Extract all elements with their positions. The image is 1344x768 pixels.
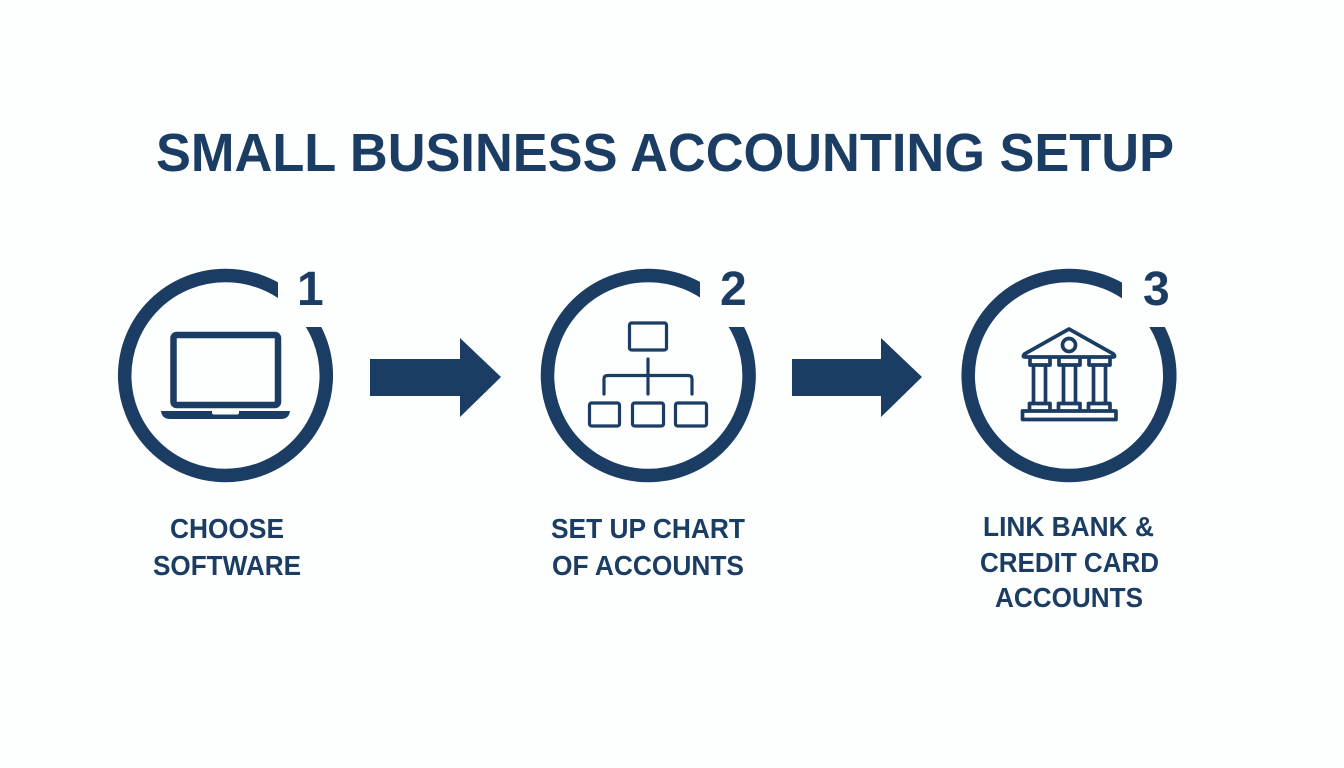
label 2: SET UP CHART: [551, 513, 745, 544]
icon: laptop: [161, 335, 290, 419]
label 2: [551, 513, 745, 581]
label 3: CREDIT CARD: [980, 547, 1159, 578]
title: SMALL BUSINESS ACCOUNTING SETUP: [156, 123, 1174, 183]
step 3: link accounts: [968, 263, 1170, 613]
label 1: [153, 513, 301, 581]
label 3: ACCOUNTS: [995, 582, 1143, 613]
label 2: OF ACCOUNTS: [552, 550, 744, 581]
label 3: LINK BANK &: [983, 511, 1154, 542]
label 1: SOFTWARE: [153, 550, 301, 581]
label 3: [980, 511, 1159, 613]
icon: org chart: [590, 323, 706, 426]
number 3: 3: [1143, 263, 1170, 316]
ring 1: [125, 276, 326, 476]
number 1: 1: [297, 263, 324, 316]
ring 2: [548, 276, 749, 476]
arrow 2: [792, 338, 922, 417]
number 2: 2: [720, 263, 747, 316]
step 1: choose software: [125, 263, 326, 581]
icon: bank: [1022, 329, 1116, 420]
arrow 1: [370, 338, 501, 417]
label 1: CHOOSE: [170, 513, 284, 544]
step 2: chart of accounts: [548, 263, 749, 581]
ring 3: [968, 276, 1170, 476]
